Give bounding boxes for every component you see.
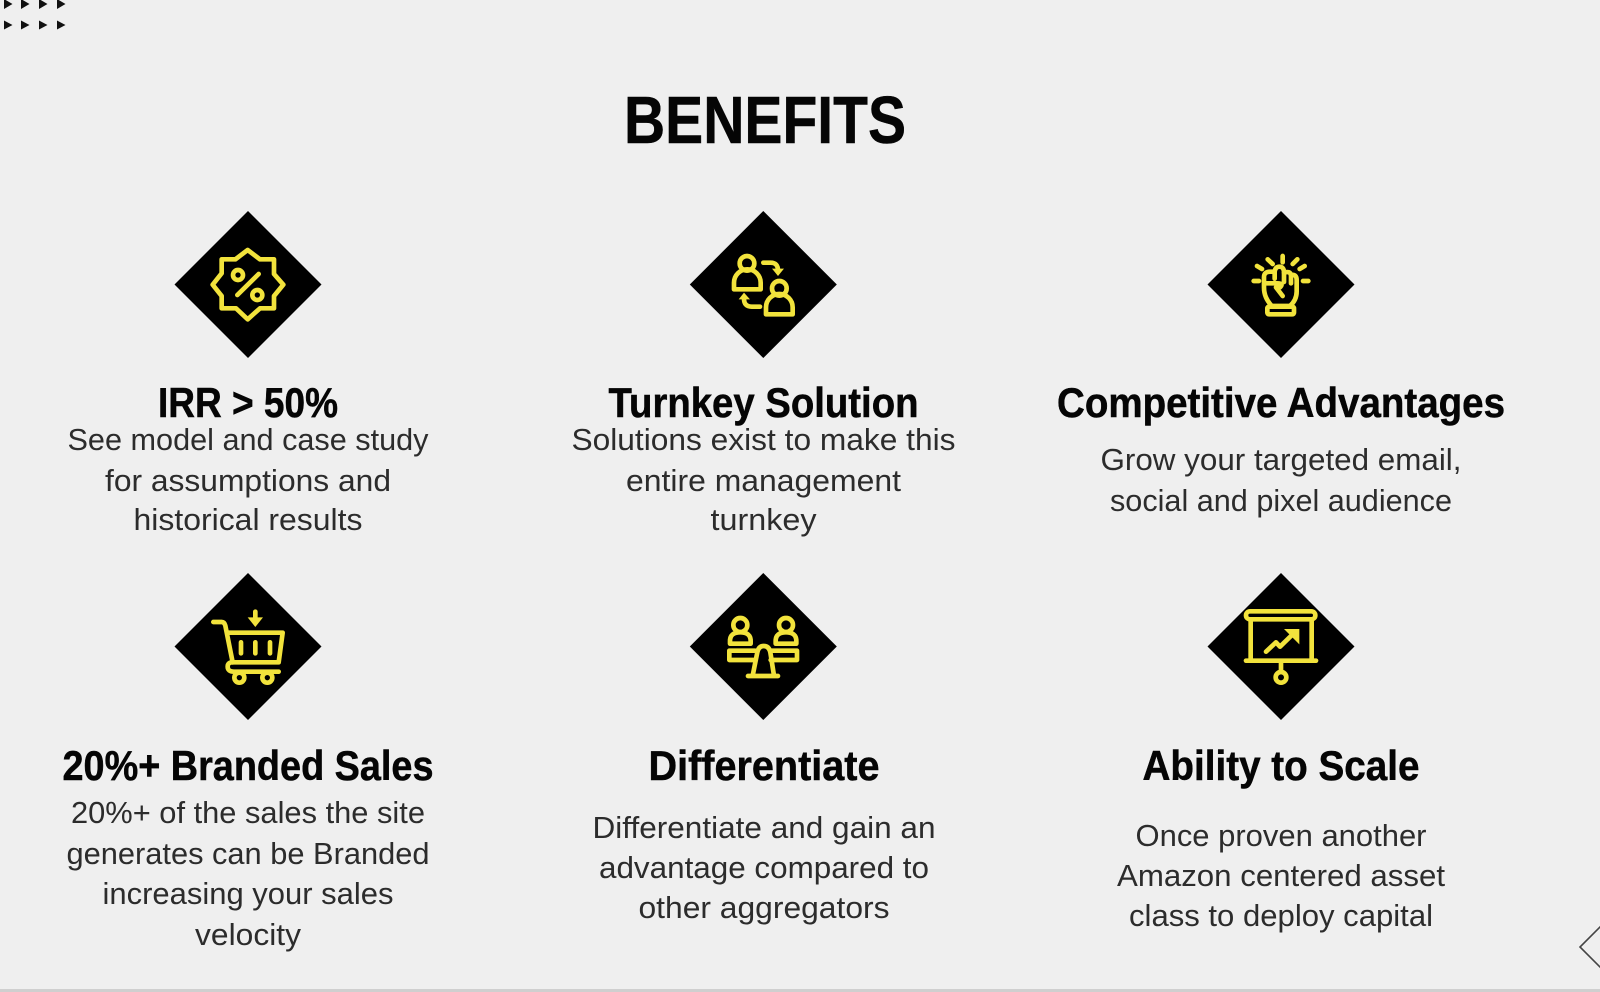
description: advantage compared to bbox=[599, 850, 929, 885]
description: velocity bbox=[195, 917, 302, 952]
panel: Turnkey Solution bbox=[572, 211, 956, 537]
description bbox=[1100, 442, 1462, 518]
description: Amazon centered asset bbox=[1117, 858, 1445, 893]
corner diamond outline bbox=[1580, 926, 1600, 968]
icon: percent badge bbox=[174, 211, 322, 358]
description: Differentiate and gain an bbox=[592, 810, 936, 845]
heading: Differentiate bbox=[648, 742, 880, 789]
description: See model and case study bbox=[68, 422, 429, 457]
description: social and pixel audience bbox=[1110, 483, 1452, 518]
description: increasing your sales bbox=[102, 876, 394, 911]
description: for assumptions and bbox=[105, 463, 391, 498]
description: Grow your targeted email, bbox=[1100, 442, 1462, 477]
description: other aggregators bbox=[638, 890, 890, 925]
description bbox=[1117, 818, 1445, 933]
title: BENEFITS bbox=[624, 83, 906, 158]
icon: shopping cart bbox=[174, 573, 322, 720]
panel: Differentiate bbox=[592, 573, 936, 925]
description: class to deploy capital bbox=[1129, 898, 1433, 933]
description: generates can be Branded bbox=[66, 836, 430, 871]
panel: IRR > 50% bbox=[68, 211, 429, 537]
icon: people exchange bbox=[690, 211, 837, 358]
description: entire management bbox=[626, 463, 901, 498]
description bbox=[572, 422, 956, 537]
description bbox=[592, 810, 936, 925]
panel: Ability to Scale bbox=[1117, 573, 1445, 933]
description: 20%+ of the sales the site bbox=[71, 795, 425, 830]
heading: Turnkey Solution bbox=[608, 379, 918, 426]
description: historical results bbox=[134, 502, 362, 537]
heading: Ability to Scale bbox=[1142, 742, 1420, 789]
panel: Competitive Advantages bbox=[1057, 211, 1505, 518]
icon: people on balance bbox=[690, 573, 837, 720]
icon: raised fist bbox=[1208, 211, 1354, 358]
description: Solutions exist to make this bbox=[572, 422, 956, 457]
heading: 20%+ Branded Sales bbox=[62, 742, 434, 789]
description: turnkey bbox=[710, 502, 817, 537]
icon: presentation board with growth arrow bbox=[1208, 573, 1354, 720]
description bbox=[66, 795, 430, 952]
description: Once proven another bbox=[1136, 818, 1426, 853]
description bbox=[68, 422, 429, 537]
heading: Competitive Advantages bbox=[1057, 379, 1505, 426]
decorative triangle pattern bbox=[4, 0, 66, 30]
panel: 20%+ Branded Sales bbox=[62, 573, 434, 952]
heading: IRR > 50% bbox=[158, 379, 338, 426]
